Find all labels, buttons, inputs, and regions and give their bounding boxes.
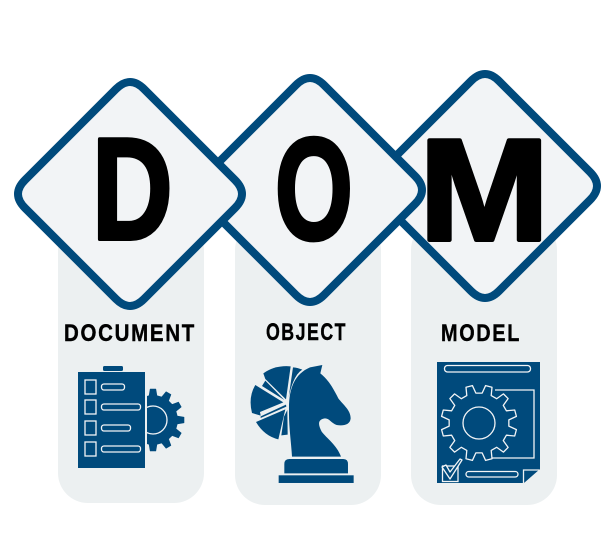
letter: D: D — [92, 109, 173, 270]
diamond: O — [198, 78, 422, 302]
frame — [492, 390, 534, 458]
checkbox — [442, 466, 458, 482]
gear — [147, 388, 184, 452]
gear hub — [463, 407, 495, 439]
icon: chess knight with pie chart — [251, 365, 354, 483]
bottom bar — [466, 472, 518, 477]
diamond: D — [18, 82, 242, 306]
icon: checklist with gear — [78, 366, 190, 468]
panel: document — [58, 220, 204, 503]
diamond: M — [373, 74, 597, 298]
knight head — [289, 365, 351, 457]
letter: M: M — [419, 108, 549, 271]
label: model: MODEL — [441, 320, 521, 347]
check mark — [442, 459, 462, 479]
panel: model — [411, 220, 557, 505]
gear — [442, 386, 516, 460]
folded corner — [524, 470, 539, 483]
pie segments — [263, 366, 291, 399]
top bar — [444, 366, 530, 372]
sheet — [437, 362, 540, 483]
icon: blueprint with gear — [437, 362, 540, 483]
letter: O: O — [275, 109, 353, 270]
clipboard body — [78, 372, 145, 468]
clipboard tab — [103, 366, 123, 371]
panel: object — [235, 220, 381, 505]
label: document: DOCUMENT — [64, 320, 196, 347]
knight collar — [284, 459, 348, 473]
checklist rows — [85, 380, 140, 456]
label: object: OBJECT — [266, 319, 347, 346]
knight base — [279, 475, 354, 483]
